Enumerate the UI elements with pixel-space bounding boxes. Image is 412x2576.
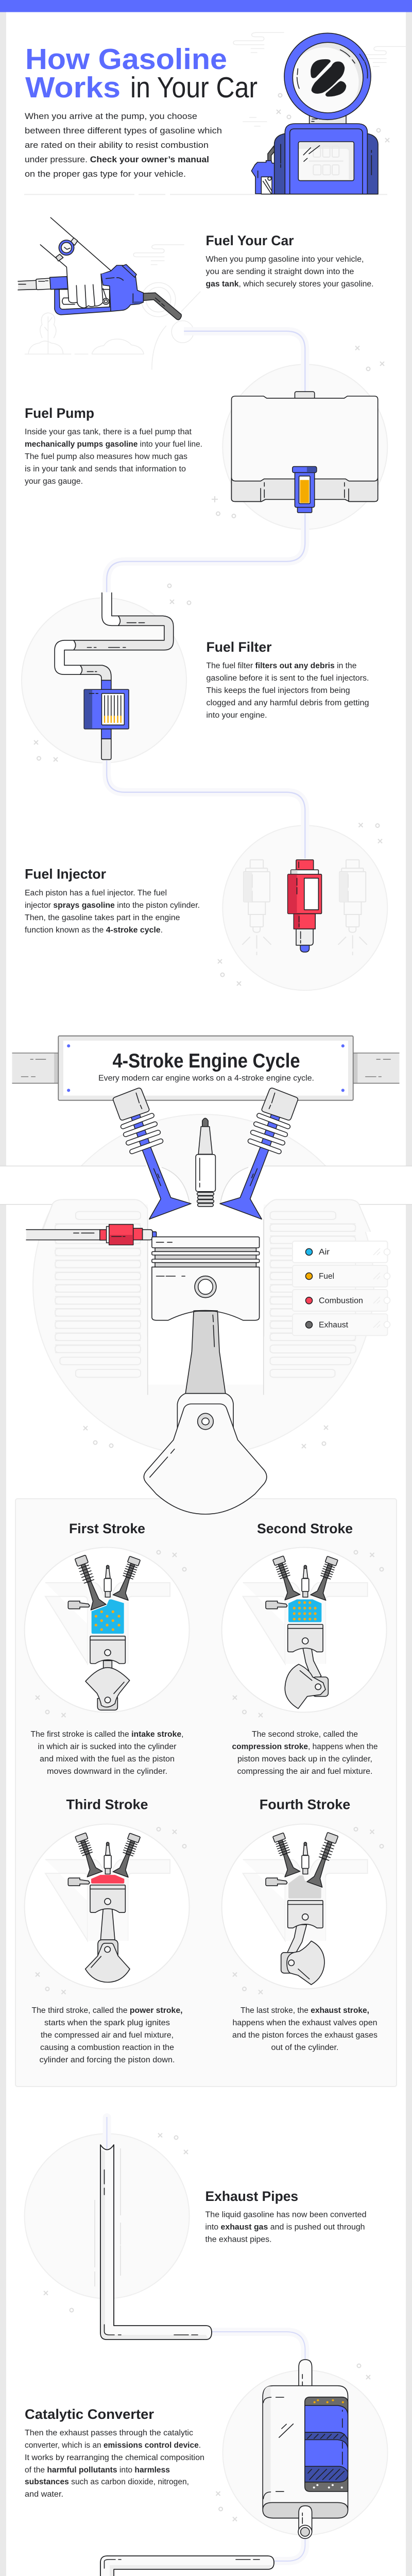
text: Fuel Filter: into your engine. — [206, 711, 267, 720]
text: Fuel Filter: gasoline before it is sent to the fuel injectors. — [206, 674, 369, 683]
text: Exhaust Pipes: into exhaust gas and is pushed out through — [205, 2223, 365, 2232]
title: How Gasoline — [25, 43, 227, 76]
text: Fuel Injector: Then, the gasoline takes part in the engine — [25, 913, 180, 922]
decorative marks: engine — [83, 1426, 328, 1448]
decorative marks: injector — [218, 823, 382, 986]
text: fourth stroke: and the piston forces the exhaust gases — [232, 2031, 377, 2040]
diagram: third stroke — [25, 1824, 190, 1989]
legend item: air — [293, 1241, 390, 1263]
text: Catalytic Converter: Then the exhaust passes through the catalytic — [25, 2429, 193, 2437]
icon: engine fuel injector — [26, 1225, 157, 1245]
heading: Second Stroke: Second Stroke — [257, 1521, 353, 1536]
diagram: first stroke — [25, 1548, 190, 1713]
icon: gas pump — [251, 33, 378, 194]
heading: Third Stroke: Third Stroke — [66, 1797, 148, 1812]
heading: Fuel Injector: Fuel Injector — [25, 867, 106, 882]
icon: intake and exhaust valves — [113, 1088, 298, 1219]
text: Exhaust Pipes: The liquid gasoline has now been converted — [205, 2211, 367, 2219]
legend item: air: Air — [319, 1248, 330, 1257]
text: Fuel Your Car: you are sending it straight down into the — [206, 267, 354, 276]
banner: 4-stroke engine cycle: 4-Stroke Engine Cycle — [112, 1050, 300, 1072]
top colour bar — [0, 0, 412, 12]
text: Fuel Your Car: gas tank, which securely stores your gasoline. — [206, 280, 374, 289]
text: third stroke — [32, 2006, 182, 2064]
heading: Catalytic Converter: Catalytic Converter — [25, 2406, 154, 2422]
icon: piston and connecting rod — [144, 1237, 267, 1514]
icon: hand with fuel nozzle — [18, 217, 181, 320]
intro paragraph — [25, 111, 222, 179]
text: second stroke: compressing the air and fuel mixture. — [237, 1767, 373, 1776]
text: fourth stroke: out of the cylinder. — [271, 2043, 339, 2052]
text: Fuel Filter: The fuel filter filters out any debris in the — [206, 662, 356, 670]
heading: Fuel Filter: Fuel Filter — [206, 639, 272, 655]
icon: exhaust pipe — [95, 2145, 212, 2340]
ground line — [24, 194, 387, 195]
text: first stroke: moves downward in the cylinder. — [47, 1767, 167, 1776]
line: into exhaust pipe — [103, 2117, 111, 2153]
text: first stroke: The first stroke is called the intake stroke, — [31, 1730, 183, 1739]
text: fourth stroke — [232, 2006, 377, 2052]
text: first stroke: and mixed with the fuel as the piston — [40, 1755, 175, 1764]
intro paragraph: When you arrive at the pump, you choose — [25, 111, 197, 121]
text: second stroke: compression stroke, happens when the — [232, 1742, 378, 1751]
intro paragraph: are rated on their ability to resist combustion — [25, 140, 209, 150]
decorative marks: exhaust, converter, muffler — [42, 2133, 370, 2576]
text: fourth stroke: The last stroke, the exhaust stroke, — [241, 2006, 369, 2015]
text: Fuel Your Car: When you pump gasoline into your vehicle, — [206, 255, 364, 264]
icon: fuel injectors — [242, 860, 367, 955]
text: second stroke: piston moves back up in the cylinder, — [237, 1755, 372, 1764]
text: second stroke: The second stroke, called the — [252, 1730, 358, 1739]
text: second stroke — [232, 1730, 378, 1776]
heading: Fourth Stroke: Fourth Stroke — [260, 1797, 350, 1812]
legend item: combustion: Combustion — [319, 1296, 363, 1305]
engine backdrop: intake and exhaust ports — [0, 1166, 412, 1205]
engine backdrop: cooling fins and cylinder — [42, 1199, 370, 1395]
text: third stroke: causing a combustion reaction in the — [40, 2043, 174, 2052]
banner: 4-stroke engine cycle: Every modern car engine works on a 4-stroke engine cycle. — [98, 1074, 314, 1083]
legend item: exhaust: Exhaust — [319, 1320, 349, 1329]
intro paragraph: under pressure. Check your owner’s manual — [25, 155, 209, 164]
text: Catalytic Converter — [25, 2429, 204, 2499]
text: Fuel Filter: clogged and any harmful debris from getting — [206, 699, 369, 707]
text: Catalytic Converter: substances such as carbon dioxide, nitrogen, — [25, 2478, 189, 2486]
text: Fuel Injector: Each piston has a fuel injector. The fuel — [25, 889, 167, 897]
fuel line: tank to filter — [107, 513, 305, 592]
legend item: exhaust — [293, 1314, 390, 1335]
heading: Fuel Pump: Fuel Pump — [25, 405, 94, 421]
icon: fuel filter — [55, 593, 174, 759]
decorative marks: header and first section — [25, 32, 406, 371]
diagram: fourth stroke — [222, 1824, 387, 1989]
text: fourth stroke: happens when the exhaust valves open — [233, 2019, 377, 2027]
background circle: filter — [22, 598, 186, 762]
text: Catalytic Converter: of the harmful pollutants into harmless — [25, 2466, 170, 2475]
text: Fuel Pump: mechanically pumps gasoline into your fuel line. — [25, 440, 202, 449]
text: Catalytic Converter: It works by rearranging the chemical composition — [25, 2453, 204, 2462]
legend item: fuel: Fuel — [319, 1272, 334, 1281]
background circle: injector — [222, 825, 387, 990]
legend item: combustion — [293, 1290, 390, 1311]
text: Fuel Injector: injector sprays gasoline into the piston cylinder. — [25, 901, 200, 910]
heading: First Stroke: First Stroke — [69, 1521, 145, 1536]
text: Catalytic Converter: converter, which is an emissions control device. — [25, 2441, 201, 2450]
icon: catalytic converter — [263, 2360, 348, 2538]
text: Fuel Injector: function known as the 4-stroke cycle. — [25, 926, 163, 935]
text: third stroke: starts when the spark plug ignites — [44, 2019, 170, 2027]
text: Fuel Filter: This keeps the fuel injectors from being — [206, 686, 350, 695]
text: Fuel Injector — [25, 889, 200, 935]
text: first stroke — [31, 1730, 183, 1776]
text: Fuel Pump: your gas gauge. — [25, 477, 83, 486]
text: Fuel Filter — [206, 662, 369, 720]
text: Fuel Pump: is in your tank and sends that information to — [25, 465, 186, 473]
text: third stroke: the compressed air and fuel mixture, — [41, 2031, 174, 2040]
engine backdrop circle — [33, 1114, 374, 1455]
title — [25, 43, 258, 104]
fuel line: car to tank — [184, 331, 305, 392]
text: Fuel Pump: The fuel pump also measures how much gas — [25, 452, 187, 461]
decorative marks: tank and filter — [34, 496, 236, 761]
legend — [293, 1241, 390, 1335]
text: Catalytic Converter: and water. — [25, 2490, 63, 2499]
heading: Fuel Your Car: Fuel Your Car — [206, 233, 294, 248]
intro paragraph: between three different types of gasoline which — [25, 126, 222, 135]
text: Fuel Pump — [25, 428, 202, 486]
icon: gas tank with fuel pump — [231, 392, 378, 513]
text: third stroke: cylinder and forcing the piston down. — [39, 2056, 175, 2064]
text: Exhaust Pipes — [205, 2211, 367, 2244]
panel: four strokes — [15, 1499, 397, 2087]
text: Fuel Your Car — [206, 255, 374, 289]
icon: spark plug — [196, 1118, 215, 1207]
intro paragraph: on the proper gas type for your vehicle. — [25, 169, 186, 179]
title: Works — [25, 71, 121, 104]
text: Fuel Pump: Inside your gas tank, there is a fuel pump that — [25, 428, 192, 436]
text: Exhaust Pipes: the exhaust pipes. — [205, 2235, 272, 2244]
background circle: exhaust pipe — [25, 2134, 190, 2299]
background circle: catalytic converter — [223, 2370, 388, 2535]
background circle: tank — [222, 364, 387, 529]
line: converter to second pipe — [274, 2538, 305, 2561]
text: third stroke: The third stroke, called the power stroke, — [32, 2006, 182, 2015]
diagram: second stroke — [222, 1548, 387, 1713]
banner: 4-stroke engine cycle — [12, 1036, 400, 1100]
heading: Exhaust Pipes: Exhaust Pipes — [205, 2189, 298, 2204]
icon: tailpipe — [100, 2556, 274, 2576]
legend item: fuel — [293, 1265, 390, 1287]
title: in Your Car — [130, 71, 258, 104]
fuel line: filter to injector — [107, 760, 305, 858]
text: first stroke: in which air is sucked into the cylinder — [38, 1742, 176, 1751]
decorative marks: stroke diagrams — [36, 1551, 383, 1994]
line: exhaust pipe to converter — [212, 2332, 305, 2361]
